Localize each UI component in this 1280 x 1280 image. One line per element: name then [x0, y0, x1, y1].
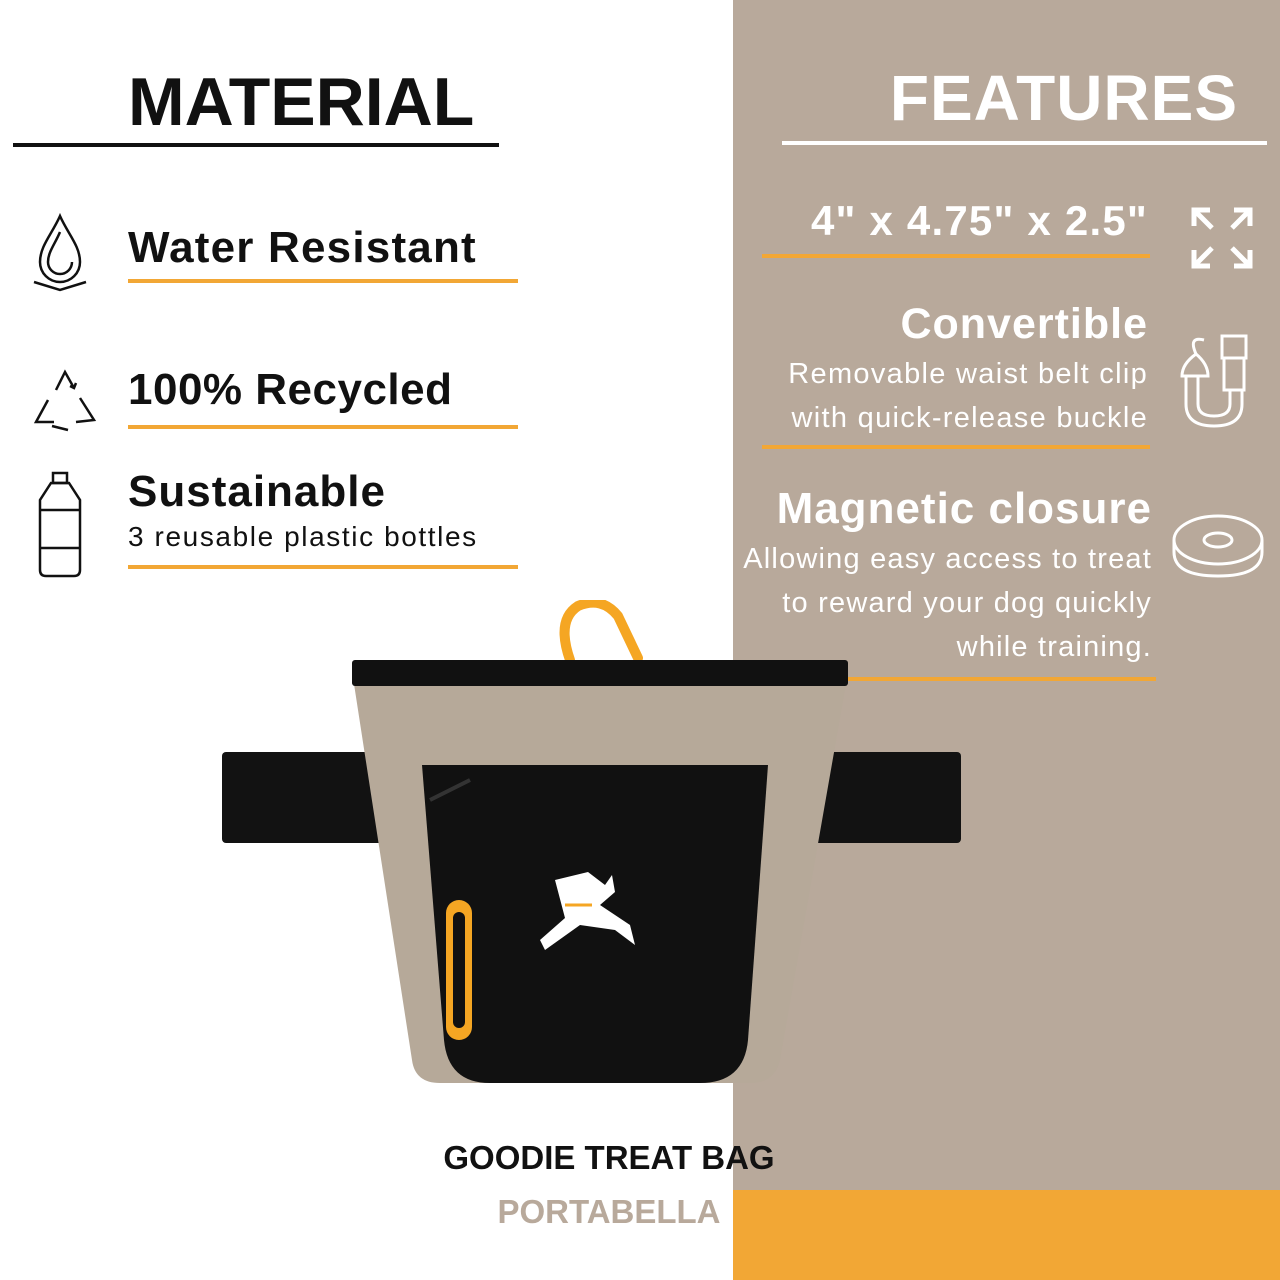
- text: convertible: [788, 300, 1148, 434]
- carabiner: [565, 603, 638, 660]
- icon: belt clip: [1180, 334, 1248, 428]
- heading: material: MATERIAL: [128, 64, 474, 140]
- heading: features: FEATURES: [890, 62, 1238, 134]
- text: recycled: 100% Recycled: [128, 365, 452, 414]
- panel: features background: [733, 0, 1280, 1190]
- text: product name: GOODIE TREAT BAG: [443, 1139, 775, 1176]
- icon: bottle: [38, 472, 82, 578]
- orange footer block: [733, 1190, 1280, 1280]
- icon: water drop: [34, 213, 86, 292]
- text: magnetic closure: Magnetic closure: [777, 484, 1152, 533]
- text: sustainable: [128, 467, 478, 552]
- illustration: treat bag: [222, 600, 961, 1083]
- text: sustainable: Sustainable: [128, 467, 386, 516]
- icon: expand arrows: [1192, 208, 1252, 268]
- bag body: [352, 660, 848, 1083]
- text: magnetic closure: while training.: [957, 631, 1152, 663]
- text: dimensions: 4" x 4.75" x 2.5": [811, 197, 1148, 244]
- text: magnetic closure: [743, 484, 1152, 663]
- text: magnetic closure: Allowing easy access to treat: [743, 543, 1152, 575]
- belt: [222, 752, 961, 843]
- text: sustainable: 3 reusable plastic bottles: [128, 521, 478, 552]
- icon: recycle: [34, 369, 96, 432]
- text: water resistant: Water Resistant: [128, 223, 477, 272]
- text: convertible: Convertible: [900, 300, 1148, 348]
- text: colour name: PORTABELLA: [497, 1193, 721, 1230]
- text: convertible: Removable waist belt clip: [788, 358, 1148, 390]
- icon: magnet disc: [1172, 514, 1264, 578]
- text: magnetic closure: to reward your dog quickly: [782, 587, 1152, 619]
- text: convertible: with quick-release buckle: [792, 402, 1148, 434]
